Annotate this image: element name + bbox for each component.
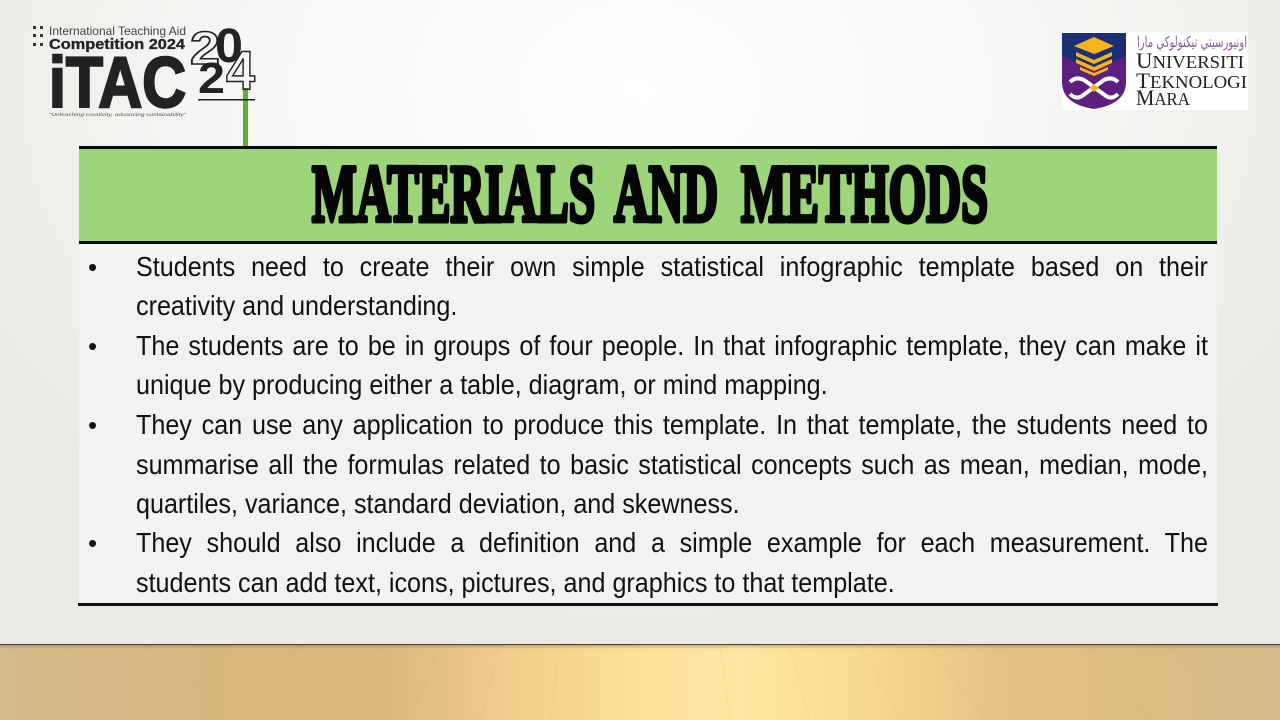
crest shield	[1062, 33, 1126, 109]
title: AND	[614, 150, 718, 239]
iTAC 2024 logo: 0	[215, 20, 243, 73]
bullet 1: •	[88, 252, 97, 282]
iTAC 2024 logo	[33, 20, 256, 122]
bullet 2: •	[88, 331, 97, 361]
bullet 4: They should also include a definition and a simple example for each measurement. The	[136, 527, 1208, 558]
title: MATERIALS	[312, 150, 595, 239]
iTAC 2024 logo: iTAC	[49, 44, 186, 122]
wooden floor strip	[0, 644, 1280, 720]
bullet 3: quartiles, variance, standard deviation, and skewness.	[136, 488, 740, 519]
bullet 3	[88, 409, 1208, 519]
bullet 4: •	[88, 528, 97, 558]
bullet 3: summarise all the formulas related to basic statistical concepts such as mean, median, mode,	[136, 449, 1208, 480]
bullet 2: The students are to be in groups of four people. In that infographic template, they can make it	[136, 330, 1208, 361]
iTAC 2024 logo: Competition 2024	[49, 37, 185, 53]
UiTM logo: UNIVERSITI	[1136, 48, 1244, 73]
UiTM logo: MARA	[1136, 85, 1190, 110]
bullet 1: Students need to create their own simple statistical infographic template based on their	[136, 251, 1208, 282]
bullet 1	[88, 251, 1208, 321]
title band	[79, 146, 1217, 244]
iTAC 2024 logo: International Teaching Aid	[49, 24, 186, 38]
bullet 4: students can add text, icons, pictures, and graphics to that template.	[136, 567, 895, 598]
bullet 3: They can use any application to produce this template. In that template, the students need to	[136, 409, 1208, 440]
UiTM logo: TEKNOLOGI	[1136, 68, 1247, 93]
UiTM logo	[1062, 32, 1248, 110]
bullet 2: unique by producing either a table, diagram, or mind mapping.	[136, 369, 828, 400]
bullet 3: •	[88, 410, 97, 440]
bullet 1: creativity and understanding.	[136, 290, 457, 321]
iTAC 2024 logo: 2	[198, 54, 225, 103]
bullet 2	[88, 330, 1208, 400]
content panel	[79, 243, 1217, 604]
iTAC 2024 logo: 4	[226, 39, 255, 101]
green connector stem	[243, 88, 248, 146]
iTAC 2024 logo: 2	[190, 22, 220, 74]
iTAC 2024 logo: "Unleashing creativity, advancing sustainability"	[49, 112, 187, 117]
